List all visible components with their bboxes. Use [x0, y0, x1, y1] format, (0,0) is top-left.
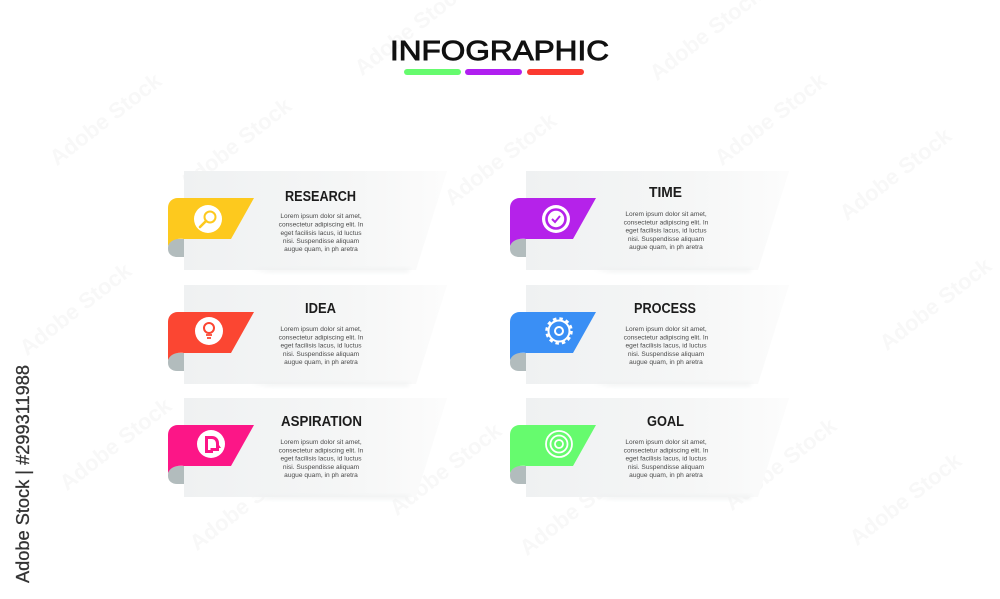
ribbon: goal — [510, 425, 596, 473]
text: process: Lorem ipsum dolor sit amet, — [625, 326, 707, 333]
text: Adobe Stock — [875, 252, 997, 355]
text: time: eget facilisis lacus, id luctus — [626, 228, 707, 234]
ribbon: process — [510, 312, 596, 360]
heading: process: PROCESS — [634, 301, 696, 317]
heading: aspiration: ASPIRATION — [281, 414, 362, 430]
title: INFOGRAPHIC — [390, 35, 609, 66]
text: time: consectetur adipiscing elit. In — [624, 220, 709, 226]
ribbon: idea — [168, 312, 254, 360]
text: research: augue quam, in ph aretra — [284, 246, 358, 253]
text: Adobe Stock — [175, 92, 297, 195]
heading: goal: GOAL — [647, 414, 684, 430]
text: Adobe Stock — [710, 67, 832, 170]
text: Adobe Stock — [845, 447, 967, 550]
text: goal: augue quam, in ph aretra — [629, 472, 703, 479]
title accent bars — [404, 69, 584, 75]
text: research: Lorem ipsum dolor sit amet, — [280, 213, 362, 220]
panel: aspiration — [168, 398, 447, 499]
text: research: nisi. Suspendisse aliquam — [283, 238, 360, 245]
text: idea: eget facilisis lacus, id luctus — [280, 342, 362, 350]
text: goal: nisi. Suspendisse aliquam — [628, 464, 705, 471]
text: aspiration: nisi. Suspendisse aliquam — [283, 464, 360, 471]
text: time: Lorem ipsum dolor sit amet, — [625, 211, 707, 218]
text: research: consectetur adipiscing elit. In — [279, 222, 364, 228]
text: research: eget facilisis lacus, id luctus — [280, 230, 362, 237]
text: Adobe Stock — [185, 452, 307, 555]
text: idea: consectetur adipiscing elit. In — [279, 334, 364, 342]
icon: target — [546, 431, 572, 457]
icon: magnifying glass — [194, 205, 222, 233]
text: goal: consectetur adipiscing elit. In — [624, 448, 709, 454]
heading: idea: IDEA — [305, 301, 336, 317]
panel: process — [510, 285, 789, 386]
text: time: augue quam, in ph aretra — [629, 244, 703, 251]
text: Adobe Stock — [45, 67, 167, 170]
ribbon: aspiration — [168, 425, 254, 473]
text: process: consectetur adipiscing elit. In — [624, 334, 709, 342]
text: Adobe Stock — [835, 122, 957, 225]
ribbon: research — [168, 198, 254, 246]
text: aspiration: consectetur adipiscing elit. In — [279, 448, 364, 454]
text: aspiration: Lorem ipsum dolor sit amet, — [280, 439, 362, 446]
text: Adobe Stock — [720, 412, 842, 515]
text: Adobe Stock — [385, 417, 507, 520]
text: time: nisi. Suspendisse aliquam — [628, 236, 705, 243]
icon: clock check — [542, 205, 570, 233]
text: Adobe Stock — [515, 457, 637, 560]
text: Adobe Stock — [15, 257, 137, 360]
icon: light bulb — [195, 317, 223, 345]
panel: idea — [168, 285, 447, 386]
text: aspiration: eget facilisis lacus, id luctus — [280, 456, 362, 462]
heading: research: RESEARCH — [285, 189, 356, 205]
text: aspiration: augue quam, in ph aretra — [284, 472, 358, 479]
ribbon: time — [510, 198, 596, 246]
heading: time: TIME — [649, 185, 682, 201]
text: goal: Lorem ipsum dolor sit amet, — [625, 439, 707, 446]
panel: time — [510, 171, 789, 272]
text: idea: nisi. Suspendisse aliquam — [283, 351, 360, 358]
text: process: augue quam, in ph aretra — [629, 359, 703, 366]
text: goal: eget facilisis lacus, id luctus — [626, 456, 707, 462]
text: process: eget facilisis lacus, id luctus — [626, 342, 707, 350]
text: Adobe Stock — [55, 392, 177, 495]
panel: research — [168, 171, 447, 272]
icon: gear — [546, 318, 572, 344]
panel: goal — [510, 398, 789, 499]
text: process: nisi. Suspendisse aliquam — [628, 351, 705, 358]
text: idea: Lorem ipsum dolor sit amet, — [280, 326, 362, 333]
text: Adobe Stock — [440, 107, 562, 210]
stock credit: Adobe Stock | #299311988 — [13, 365, 33, 583]
text: idea: augue quam, in ph aretra — [284, 359, 358, 366]
icon: head — [197, 430, 225, 458]
